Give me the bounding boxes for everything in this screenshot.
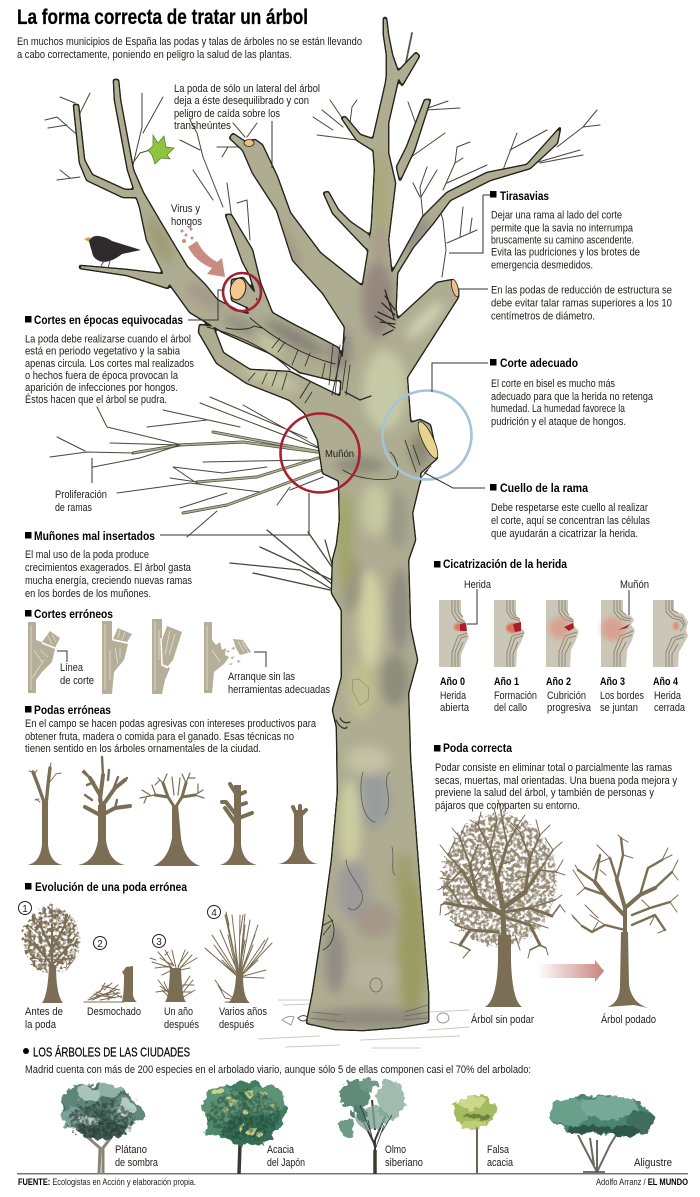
- wound stage 3: [601, 600, 635, 667]
- virus dots: [180, 228, 194, 243]
- wound labels: Herida: [464, 579, 492, 591]
- stage captions: del callo: [494, 702, 527, 714]
- cut labels: Arranque sin las: [228, 671, 295, 683]
- label: branch proliferation: Proliferación: [55, 489, 107, 501]
- section: Tirasavias: Evita las pudriciones y los brotes de: [491, 246, 640, 258]
- arrow: pruning result: [537, 960, 604, 982]
- section: Poda correcta: pájaros que comparten su entorno.: [435, 800, 580, 812]
- title: La forma correcta de tratar un árbol: [17, 6, 308, 29]
- bark fill and mottling: [74, 18, 560, 1030]
- section: Cicatrización de la herida: Cicatrización de la herida: [443, 557, 567, 571]
- cut faces: [228, 276, 248, 302]
- stage captions: progresiva: [547, 702, 592, 714]
- number 2: [94, 936, 106, 950]
- bark union outline: [74, 18, 560, 1030]
- city tree: aligustre: [550, 1095, 652, 1172]
- section: Tirasavias: bruscamente su camino ascendente.: [491, 234, 634, 246]
- stage captions: Año 1: [494, 676, 519, 688]
- label: stump: Muñón: [325, 448, 354, 460]
- city tree labels: Aligustre: [634, 1157, 672, 1169]
- section: Corte adecuado: [490, 356, 654, 428]
- label: virus: hongos: [171, 216, 202, 228]
- step labels: después: [164, 1019, 199, 1031]
- wound stage 1: [494, 600, 525, 667]
- cut diagram 3: [152, 619, 182, 694]
- section: Poda correcta: Poda correcta: [443, 741, 512, 755]
- section: Muñones mal insertados: crecimientos exagerados. El árbol gasta: [25, 562, 192, 574]
- step 1 tree: [24, 907, 80, 1003]
- section: Cortes erróneos: Cortes erróneos: [34, 607, 113, 621]
- ground line: [17, 1173, 688, 1174]
- cut diagram 2: [102, 621, 132, 694]
- cut labels: de corte: [60, 675, 94, 687]
- section: Tirasavias: Dejar una rama al lado del corte: [491, 210, 622, 222]
- section: Podas erróneas: Podas erróneas: [34, 703, 111, 717]
- section: Evolución de una poda errónea: [18, 880, 272, 1031]
- stage captions: cerrada: [654, 702, 686, 714]
- section: Tirasavias: permite que la savia no interrumpa: [491, 222, 634, 234]
- stage captions: [440, 676, 686, 714]
- step labels: [25, 1006, 267, 1031]
- label: branch proliferation: de ramas: [55, 502, 92, 514]
- stage captions: Año 4: [653, 676, 679, 688]
- text: one-sided pruning: La poda de sólo un lateral del árbol: [174, 83, 320, 95]
- step 2 stump: [84, 966, 137, 1002]
- section: Corte adecuado: pudrición y el ataque de hongos.: [491, 416, 626, 428]
- section: Tirasavias: debe evitar talar ramas superiores a los 10: [491, 298, 672, 310]
- section: Cuello de la rama: Cuello de la rama: [500, 481, 588, 495]
- city tree labels: [115, 1144, 672, 1169]
- wound stage 2: [546, 600, 579, 667]
- section: Cuello de la rama: el corte, aquí se concentran las células: [491, 515, 650, 527]
- stage captions: Herida: [440, 690, 467, 702]
- step labels: después: [219, 1019, 254, 1031]
- wound labels: [464, 579, 649, 591]
- step 4 regrown tree: [205, 912, 272, 1003]
- stage captions: abierta: [440, 702, 470, 714]
- stage captions: Los bordes: [600, 690, 644, 702]
- city tree labels: Acacia: [267, 1144, 295, 1156]
- city tree: plátano de sombra: [60, 1084, 143, 1174]
- text: one-sided pruning: deja a éste desequilibrado y con: [174, 95, 309, 107]
- pruned tree silhouette 1: [27, 763, 63, 865]
- section: Corte adecuado: humedad. La humedad favorece la: [491, 403, 626, 415]
- section: Cuello de la rama: Debe respetarse este cuello al realizar: [491, 502, 648, 514]
- section: Evolución de una poda errónea: Evolución de una poda errónea: [35, 880, 187, 894]
- city tree labels: de sombra: [115, 1157, 159, 1169]
- pruned tree silhouette 2: [78, 757, 130, 865]
- cut labels: [60, 662, 330, 696]
- stage captions: Año 2: [546, 676, 571, 688]
- city tree labels: siberiano: [385, 1157, 423, 1169]
- section: Tirasavias: emergencia desmedidos.: [491, 260, 593, 272]
- tree labels: Árbol sin podar: [471, 1013, 534, 1026]
- section: Cortes en épocas equivocadas: La poda debe realizarse cuando el árbol: [25, 334, 191, 346]
- circles and leader lines: [57, 121, 629, 667]
- tree labels: Árbol podado: [601, 1013, 656, 1026]
- section: Podas erróneas: [25, 703, 318, 866]
- text: one-sided pruning: transheúntes: [174, 120, 231, 132]
- stage captions: Año 0: [440, 676, 465, 688]
- city tree: falsa acacia: [454, 1095, 496, 1174]
- wound stage 4: [653, 600, 688, 667]
- section: Podas erróneas: obtener fruta, madera o comida para el ganado. Esas técnicas no: [25, 731, 294, 743]
- section: Poda correcta: previene la salud del árbol, y también de personas y: [435, 787, 654, 799]
- section: Tirasavias: [490, 189, 672, 322]
- label: virus: Virus y: [171, 203, 200, 215]
- section: Cortes en épocas equivocadas: Cortes en épocas equivocadas: [34, 313, 183, 327]
- main tree: [74, 18, 560, 1030]
- section: Poda correcta: [434, 741, 678, 1026]
- city tree: acacia del Japón: [202, 1082, 286, 1174]
- number 2: 2: [97, 939, 103, 950]
- section: Cortes en épocas equivocadas: [25, 313, 194, 406]
- step 3 sprouting stump: [150, 950, 197, 1002]
- section: Muñones mal insertados: El mal uso de la poda produce: [25, 549, 149, 561]
- arrow: virus to cut: [188, 241, 225, 277]
- section: Tirasavias: centímetros de diámetro.: [491, 310, 595, 322]
- number 4: [208, 906, 220, 919]
- stage captions: Formación: [494, 690, 537, 702]
- section: Muñones mal insertados: en los bordes de los muñones.: [25, 588, 151, 600]
- section: Muñones mal insertados: Muñones mal insertados: [34, 529, 155, 543]
- section: Corte adecuado: adecuado para que la herida no retenga: [491, 391, 654, 403]
- pruned tree silhouette 5: [278, 806, 318, 864]
- label: branch proliferation: [55, 489, 107, 514]
- stage captions: Cubrición: [547, 690, 586, 702]
- number 1: 1: [22, 904, 28, 915]
- city tree labels: Falsa: [487, 1144, 510, 1156]
- cut labels: Línea: [60, 662, 84, 674]
- text: one-sided pruning: [174, 83, 320, 132]
- city tree labels: Plátano: [115, 1144, 147, 1156]
- city tree: olmo siberiano: [340, 1078, 403, 1174]
- intro text: [17, 36, 362, 61]
- section: Corte adecuado: El corte en bisel es mucho más: [491, 378, 615, 390]
- wound labels: Muñón: [620, 579, 649, 591]
- stage captions: Herida: [654, 690, 682, 702]
- left upper twigs: [45, 93, 257, 240]
- section: Tirasavias: En las podas de reducción de estructura se: [491, 284, 672, 296]
- cut labels: herramientas adecuadas: [228, 684, 330, 696]
- section: Los árboles de las ciudades: [17, 1044, 688, 1174]
- proliferation twigs, outer dark: [133, 432, 322, 513]
- cut diagram 1: [28, 622, 60, 693]
- ground strokes under main tree: [258, 1000, 470, 1048]
- main tree twigs: [45, 33, 600, 590]
- section: Cortes erróneos: [25, 607, 330, 696]
- source: FUENTE: Ecologistas en Acción y elaboración propia.: [18, 1177, 196, 1187]
- unpruned tree: [438, 800, 565, 1007]
- section: Corte adecuado: Corte adecuado: [500, 356, 578, 370]
- step labels: Un año: [164, 1006, 193, 1018]
- number 3: [152, 934, 166, 948]
- intro text: a cabo correctamente, poniendo en peligro la salud de las plantas.: [17, 49, 292, 61]
- stage captions: se juntan: [600, 702, 638, 714]
- tree labels: [471, 1013, 656, 1026]
- pruned tree silhouette 3: [140, 773, 204, 866]
- label: virus: [171, 203, 202, 228]
- section: Los árboles de las ciudades: LOS ÁRBOLES DE LAS CIUDADES: [33, 1044, 190, 1060]
- pruned tree: [572, 835, 678, 1008]
- step labels: Varios años: [219, 1006, 267, 1018]
- wound stage 0: [439, 600, 469, 667]
- city tree labels: Olmo: [385, 1144, 406, 1156]
- intro text: En muchos municipios de España las podas y talas de árboles no se están llevando: [17, 36, 362, 48]
- section: Los árboles de las ciudades: Madrid cuenta con más de 200 especies en el arbolado viario, aunque sólo 5 de ellas componen casi el 70% del arbolado:: [25, 1064, 531, 1076]
- section: Muñones mal insertados: [25, 529, 192, 600]
- text: one-sided pruning: peligro de caída sobre los: [174, 108, 280, 120]
- section: Cuello de la rama: [490, 481, 650, 540]
- number 4: 4: [211, 908, 217, 919]
- section: Cortes en épocas equivocadas: o hechos fuera de época provocan la: [25, 370, 179, 382]
- icon: blackbird: [84, 236, 141, 268]
- section: Podas erróneas: tienen sentido en los árboles ornamentales de la ciudad.: [25, 743, 261, 755]
- bark details: [207, 290, 431, 1022]
- section: Cortes en épocas equivocadas: apenas circula. Los cortes mal realizados: [25, 358, 194, 370]
- section: Cortes en épocas equivocadas: Éstos hacen que el árbol se pudra.: [25, 393, 167, 406]
- credit: Adolfo Arranz / EL MUNDO: [596, 1177, 688, 1187]
- section: Podas erróneas: En el campo se hacen podas agresivas con intereses productivos para: [25, 718, 317, 730]
- cut diagram 4: [204, 622, 251, 693]
- top and right twigs: [313, 100, 600, 277]
- pruned tree silhouette 4: [220, 784, 257, 865]
- stage captions: Año 3: [600, 676, 625, 688]
- icon: maple leaf: [148, 135, 174, 164]
- step labels: la poda: [25, 1019, 57, 1031]
- step labels: Desmochado: [87, 1006, 141, 1018]
- section: Tirasavias: Tirasavias: [500, 189, 549, 203]
- lower growth fan: [230, 530, 335, 590]
- section: Cicatrización de la herida: [434, 557, 688, 714]
- number 1: [18, 902, 32, 915]
- section: Cortes en épocas equivocadas: aparición de infecciones por hongos.: [25, 382, 178, 394]
- step labels: Antes de: [25, 1006, 63, 1018]
- section: Cortes en épocas equivocadas: está en periodo vegetativo y la sabia: [25, 346, 181, 358]
- city tree labels: acacia: [487, 1157, 514, 1169]
- city tree labels: del Japón: [267, 1157, 305, 1169]
- section: Muñones mal insertados: mucha energía, creciendo nuevas ramas: [25, 575, 192, 587]
- section: Cuello de la rama: que ayudarán a cicatrizar la herida.: [491, 528, 638, 540]
- number 3: 3: [156, 937, 162, 948]
